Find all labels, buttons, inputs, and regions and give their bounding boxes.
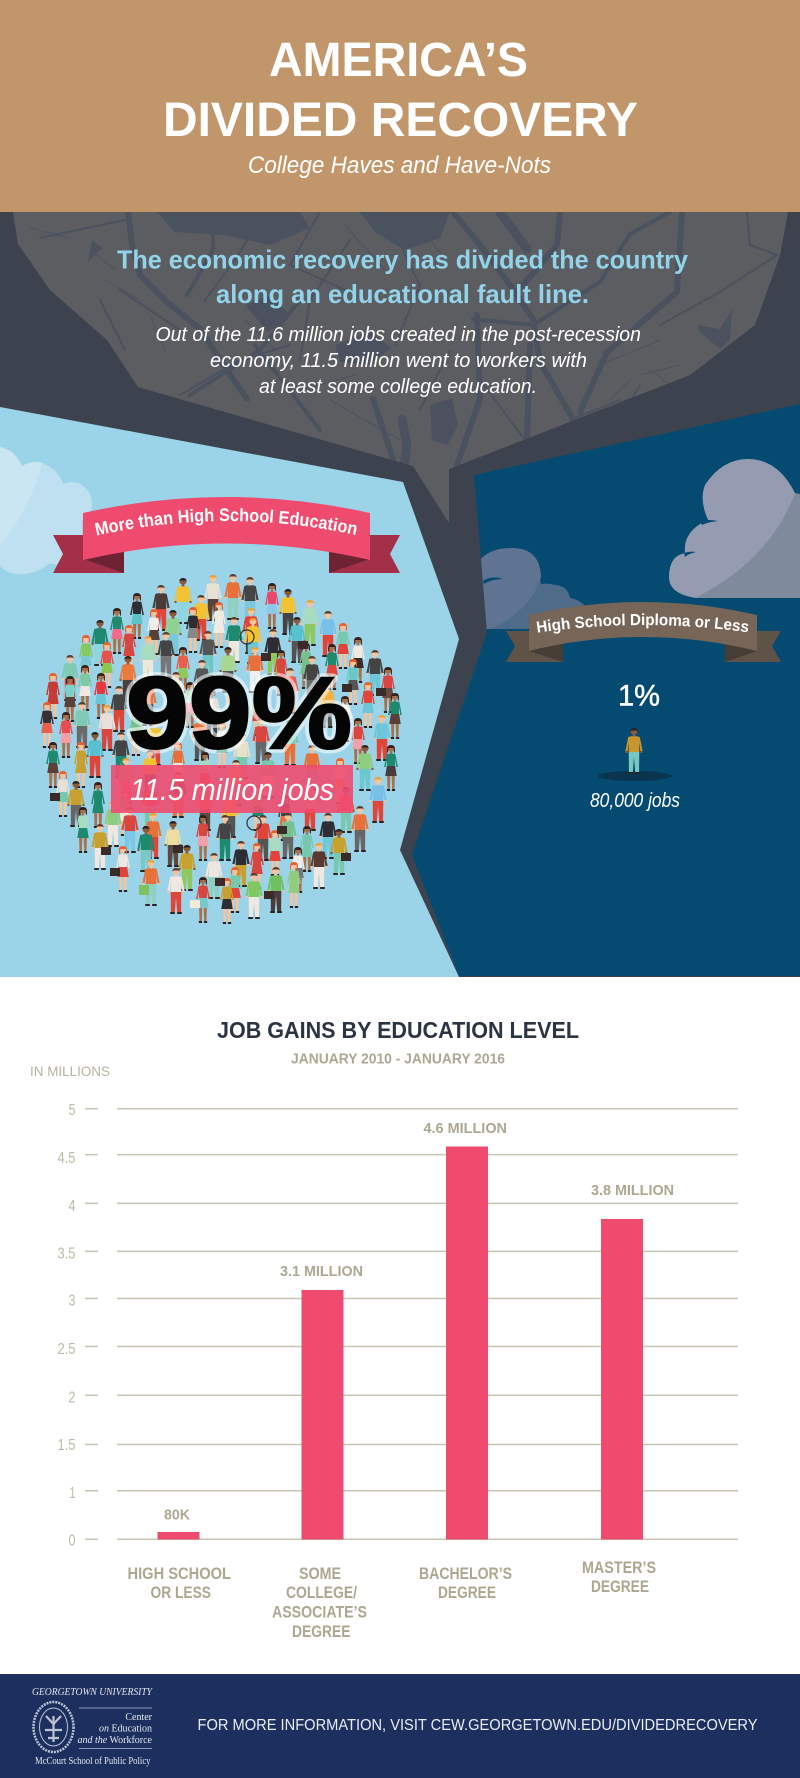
x axis labels: DEGREE [591,1578,649,1596]
crowd of workers [40,574,402,924]
paragraph: at least some college education. [259,375,537,398]
y axis labels: 0 [68,1532,76,1550]
logo: Georgetown University: GEORGETOWN UNIVERSITY [32,1687,153,1698]
callout: 11.5 million jobs: 11.5 million jobs [130,772,334,807]
panel: fault line backdrop [0,212,800,977]
icon: lone worker [598,728,672,781]
footer link text: FOR MORE INFORMATION, VISIT CEW.GEORGETOWN.EDU/DIVIDEDRECOVERY [198,1717,758,1734]
x axis labels: COLLEGE/ [286,1584,357,1602]
y axis labels: 2.5 [58,1341,76,1358]
heading [117,244,689,309]
bar: high school or less [158,1506,200,1540]
logo: Georgetown University: McCourt School of Public Policy [35,1756,151,1767]
bar: master's [591,1182,674,1540]
label: 80,000 jobs: 80,000 jobs [590,790,680,812]
logo: Georgetown University: Center [125,1712,153,1723]
icon: large cloud [669,459,800,598]
bar: master's: 3.8 MILLION [591,1182,674,1199]
subtitle: College Haves and Have-Nots [248,152,551,179]
y axis labels: 1 [70,1485,76,1502]
paragraph: Out of the 11.6 million jobs created in the post-recession [156,323,641,346]
logo: Georgetown University: and the Workforce [77,1735,153,1746]
ribbon: high school diploma or less [506,602,781,662]
x axis labels: DEGREE [438,1584,496,1602]
x axis labels: ASSOCIATE’S [272,1604,367,1622]
stat: 99%: 99% [126,656,352,770]
panel: header [0,0,800,212]
heading: The economic recovery has divided the country [117,244,689,274]
x axis labels: OR LESS [150,1584,211,1602]
y axis labels: 5 [68,1102,76,1119]
stat: 1%: 1% [618,680,660,712]
icon: left cloud [0,447,92,574]
y axis labels: 3.5 [58,1246,76,1262]
x axis labels: SOME [299,1565,341,1583]
wheelchairs [240,630,261,830]
x axis labels [128,1559,656,1641]
title [163,33,638,147]
heading: along an educational fault line. [216,279,589,309]
bar: some college [280,1263,363,1540]
panel: more than high school [0,407,459,977]
y axis labels: 4.5 [58,1150,76,1167]
x axis labels: MASTER’S [582,1559,656,1577]
axis title: IN MILLIONS [30,1063,110,1079]
paragraph [156,323,641,398]
x axis labels: HIGH SCHOOL [128,1565,231,1583]
title: AMERICA’S [269,33,528,87]
bar: high school or less: 80K [164,1506,190,1524]
chart title: JOB GAINS BY EDUCATION LEVEL [217,1017,579,1043]
icon: university seal [34,1702,74,1752]
ribbon: high school diploma or less: High School Diploma or Less [536,613,748,634]
y axis labels: 4 [68,1198,76,1215]
callout: 11.5 million jobs [111,765,353,813]
bar: some college: 3.1 MILLION [280,1263,363,1280]
logo: Georgetown University [32,1687,153,1767]
ribbon: more than high school education: More than High School Education [94,508,357,536]
y axis labels: 1.5 [58,1437,76,1454]
chart subtitle: JANUARY 2010 - JANUARY 2016 [291,1052,505,1068]
paragraph: economy, 11.5 million went to workers with [210,349,587,372]
stat: 99%: 99% [126,656,352,770]
panel: bar chart [30,1017,738,1641]
ribbon: more than high school education [53,497,400,573]
text block: intro [117,244,689,398]
bar: bachelor's [424,1120,507,1540]
x axis labels: DEGREE [292,1623,350,1641]
logo: Georgetown University: on Education [99,1724,152,1734]
bar: bachelor's: 4.6 MILLION [424,1120,507,1137]
title: DIVIDED RECOVERY [163,93,638,147]
x axis labels: BACHELOR’S [419,1565,512,1583]
panel: high school or less [412,404,800,976]
y axis labels: 2 [68,1390,76,1406]
y axis labels [58,1102,76,1550]
y axis labels: 3 [68,1292,76,1310]
bags [50,641,386,899]
icon: small cloud [481,548,584,629]
panel: footer [0,1674,800,1778]
